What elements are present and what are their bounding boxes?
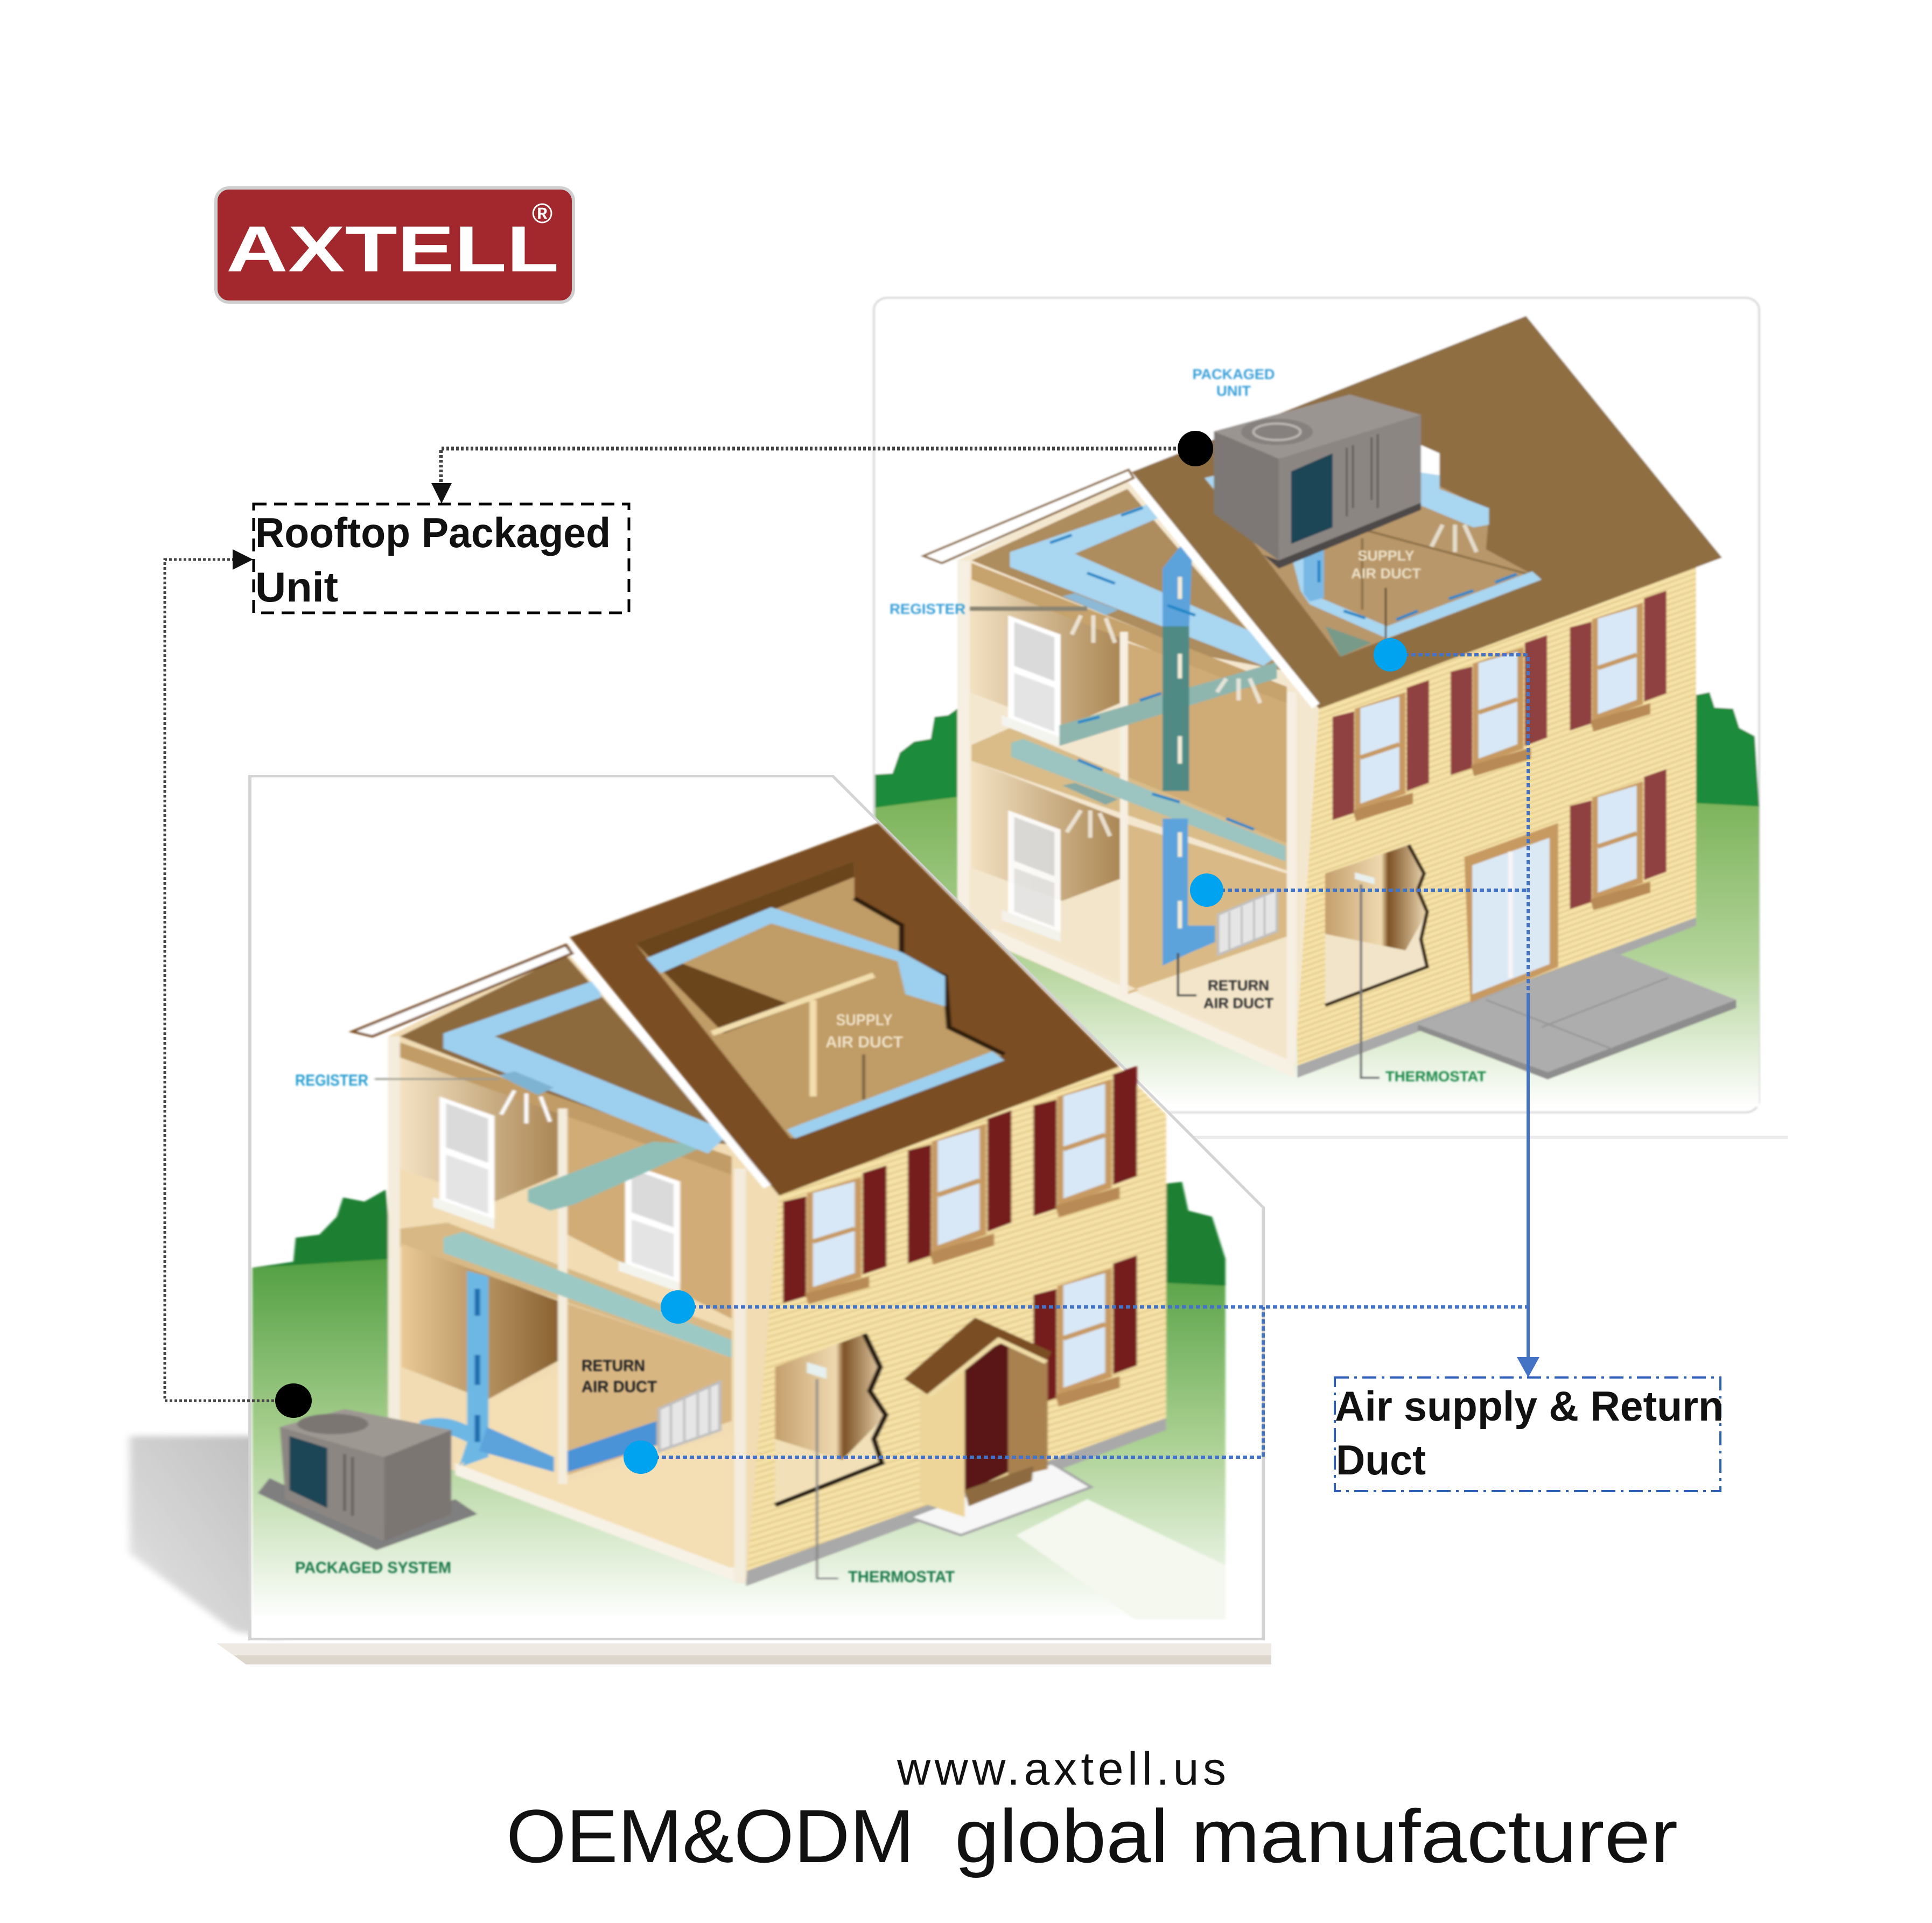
labels: bottom house (295, 1011, 955, 1586)
blue marker: top attic duct (1374, 638, 1407, 672)
floor duct (443, 1232, 732, 1358)
labels: bottom house: REGISTER (295, 1072, 368, 1089)
callout: air supply and return duct: Air supply & Return (1335, 1382, 1724, 1430)
register under floor duct (1062, 783, 1118, 805)
thermostat leader (1361, 884, 1380, 1078)
return horizontal duct (479, 1427, 554, 1472)
lower room left wall (971, 761, 1120, 901)
callout: rooftop packaged unit: Unit (255, 563, 338, 611)
roof edge white trim (1129, 475, 1316, 706)
attic joist line (1362, 530, 1538, 610)
windows in rooms (433, 1096, 494, 1229)
register air streams (501, 1090, 550, 1123)
panel frame (874, 298, 1759, 1113)
panel: ground packaged system illustration (130, 776, 1271, 1665)
roof (570, 823, 1119, 1195)
ceiling joists (712, 975, 874, 1096)
top panel shadow line (1174, 1136, 1788, 1139)
return leader (1178, 953, 1196, 995)
website: www.axtell.us (897, 1743, 1226, 1795)
dark attic shadow (635, 861, 854, 1033)
attic duct ring (646, 907, 1004, 1138)
lower floor edge (455, 1463, 744, 1584)
callout: rooftop packaged unit (254, 504, 629, 613)
white gap behind unit (1421, 445, 1439, 486)
labels: top house: SUPPLY (1358, 548, 1414, 564)
attic supply duct ring (1205, 475, 1542, 638)
attic supply duct (1010, 503, 1277, 666)
attic space (400, 955, 732, 1144)
attic air streams (1431, 525, 1476, 552)
lawn (252, 1253, 1226, 1619)
labels: top house: PACKAGED (1192, 366, 1275, 382)
windows on front wall (1333, 591, 1667, 910)
foundation (746, 1418, 1166, 1586)
white walkway (1016, 1499, 1226, 1619)
trees right (1696, 692, 1759, 807)
attic stepped edge (854, 898, 1004, 1054)
left gable eave (923, 470, 1133, 563)
logo: AXTELL (216, 188, 573, 302)
return riser middle (1163, 626, 1189, 791)
callout: rooftop packaged unit: Rooftop Packaged (255, 509, 611, 556)
return grille (659, 1382, 720, 1451)
register leader (375, 1078, 499, 1080)
logo: AXTELL: AXTELL (226, 212, 559, 285)
roof edge white trim (570, 949, 767, 1187)
trees left (252, 1190, 392, 1268)
lower right room wall (568, 1304, 732, 1475)
panel frame (250, 776, 1263, 1639)
labels: top house (890, 366, 1487, 1085)
supply leader (1385, 588, 1387, 638)
labels: bottom house: PACKAGED SYSTEM (295, 1559, 451, 1577)
floor supply duct (1011, 739, 1286, 862)
attic supply duct (443, 979, 724, 1153)
panel: rooftop packaged unit illustration (874, 298, 1759, 1113)
lower floor (998, 879, 1287, 1058)
return grille (1218, 890, 1277, 955)
patio slab (1418, 950, 1736, 1079)
windows left (1002, 616, 1061, 747)
thermostat leader (817, 1379, 838, 1578)
upper room left wall (400, 1045, 558, 1201)
back duct lower (1059, 662, 1277, 746)
window in upper right room (619, 1163, 680, 1292)
blue marker: bottom return duct (624, 1440, 658, 1474)
return riser lower (1163, 819, 1215, 966)
labels: bottom house: SUPPLY (836, 1011, 893, 1029)
labels: top house: THERMOSTAT (1385, 1068, 1487, 1085)
supply leader (863, 1054, 864, 1100)
attic space (971, 489, 1282, 670)
thermostat wall cutout (775, 1334, 886, 1505)
attic drop duct (1304, 544, 1324, 602)
upper room right wall (568, 1115, 732, 1319)
register air streams (1067, 616, 1260, 838)
cutaway base (388, 946, 779, 1583)
logo: AXTELL: ® (532, 198, 552, 229)
upper floor slab (400, 1222, 732, 1358)
front wall with siding (1294, 566, 1696, 1066)
lower room right wall (1128, 824, 1287, 994)
base strip (216, 1644, 1271, 1665)
supply duct flow arrows (1050, 508, 1254, 829)
labels: top house: RETURN (1208, 977, 1269, 994)
tagline: manufacturer (1191, 1794, 1678, 1878)
arrow: ground unit to label (165, 549, 312, 1418)
upper floor slab (971, 728, 1287, 871)
register under attic duct (1062, 593, 1118, 616)
patio door (1464, 823, 1558, 1003)
cutaway base (957, 475, 1319, 1076)
callout: air supply and return duct (1335, 1377, 1724, 1491)
thermostat wall cutout (1325, 845, 1427, 1005)
register under attic duct (499, 1071, 554, 1095)
drop shadow left (130, 1436, 282, 1639)
callout: air supply and return duct: Duct (1336, 1436, 1426, 1484)
tagline: OEM&ODM (506, 1794, 914, 1878)
return horizontal duct right (568, 1421, 657, 1472)
windows left lower (1002, 810, 1061, 942)
attic well (1205, 434, 1542, 656)
blue marker: bottom floor duct (661, 1290, 695, 1324)
arrow: rooftop unit to label (431, 431, 1213, 504)
labels: top house: AIR DUCT (1203, 995, 1273, 1011)
labels: top house: AIR DUCT (1351, 565, 1421, 582)
labels: bottom house: RETURN (582, 1357, 645, 1375)
lower floor (455, 1373, 732, 1568)
attic dark corner (1325, 626, 1371, 656)
duct connector lines (641, 655, 1528, 1457)
arrow head: air supply (1517, 1357, 1539, 1377)
floor edge (991, 928, 1294, 1078)
trees right (1166, 1182, 1226, 1286)
ceiling beam (400, 1043, 732, 1174)
upper room right wall (1128, 643, 1287, 846)
vertical posts (957, 561, 1296, 1063)
posts (388, 1037, 746, 1583)
labels: bottom house: THERMOSTAT (848, 1568, 955, 1586)
left gable eave (353, 945, 572, 1037)
riser arrows (475, 1289, 479, 1442)
ceiling beam (971, 563, 1287, 703)
blue marker: top return duct (1190, 873, 1223, 907)
windows on front wall (783, 1066, 1137, 1407)
labels: top house: REGISTER (890, 601, 965, 617)
front wall with siding (744, 1066, 1166, 1583)
packaged unit (1214, 395, 1421, 569)
tagline: global (955, 1794, 1168, 1878)
return riser upper (1163, 547, 1192, 626)
foundation (1297, 918, 1696, 1078)
packaged system unit (258, 1409, 478, 1550)
labels: bottom house: AIR DUCT (825, 1033, 903, 1051)
attic well (635, 861, 1004, 1138)
tagline (506, 1794, 1678, 1878)
upper short duct (528, 1142, 708, 1211)
duct arrows (1178, 577, 1182, 928)
packaged outlet duct (419, 1418, 475, 1466)
attic duct arrows (1319, 561, 1517, 620)
front porch (904, 1318, 1091, 1535)
labels: top house: UNIT (1216, 383, 1251, 399)
labels: bottom house: AIR DUCT (582, 1378, 657, 1396)
upper room left wall (970, 577, 1120, 728)
return riser (463, 1271, 488, 1466)
lower left room wall (402, 1244, 558, 1400)
attic right duct (1421, 472, 1489, 527)
lawn (875, 794, 1759, 1107)
roof (1130, 316, 1722, 709)
trees left (875, 709, 961, 808)
register leader (970, 606, 1087, 611)
